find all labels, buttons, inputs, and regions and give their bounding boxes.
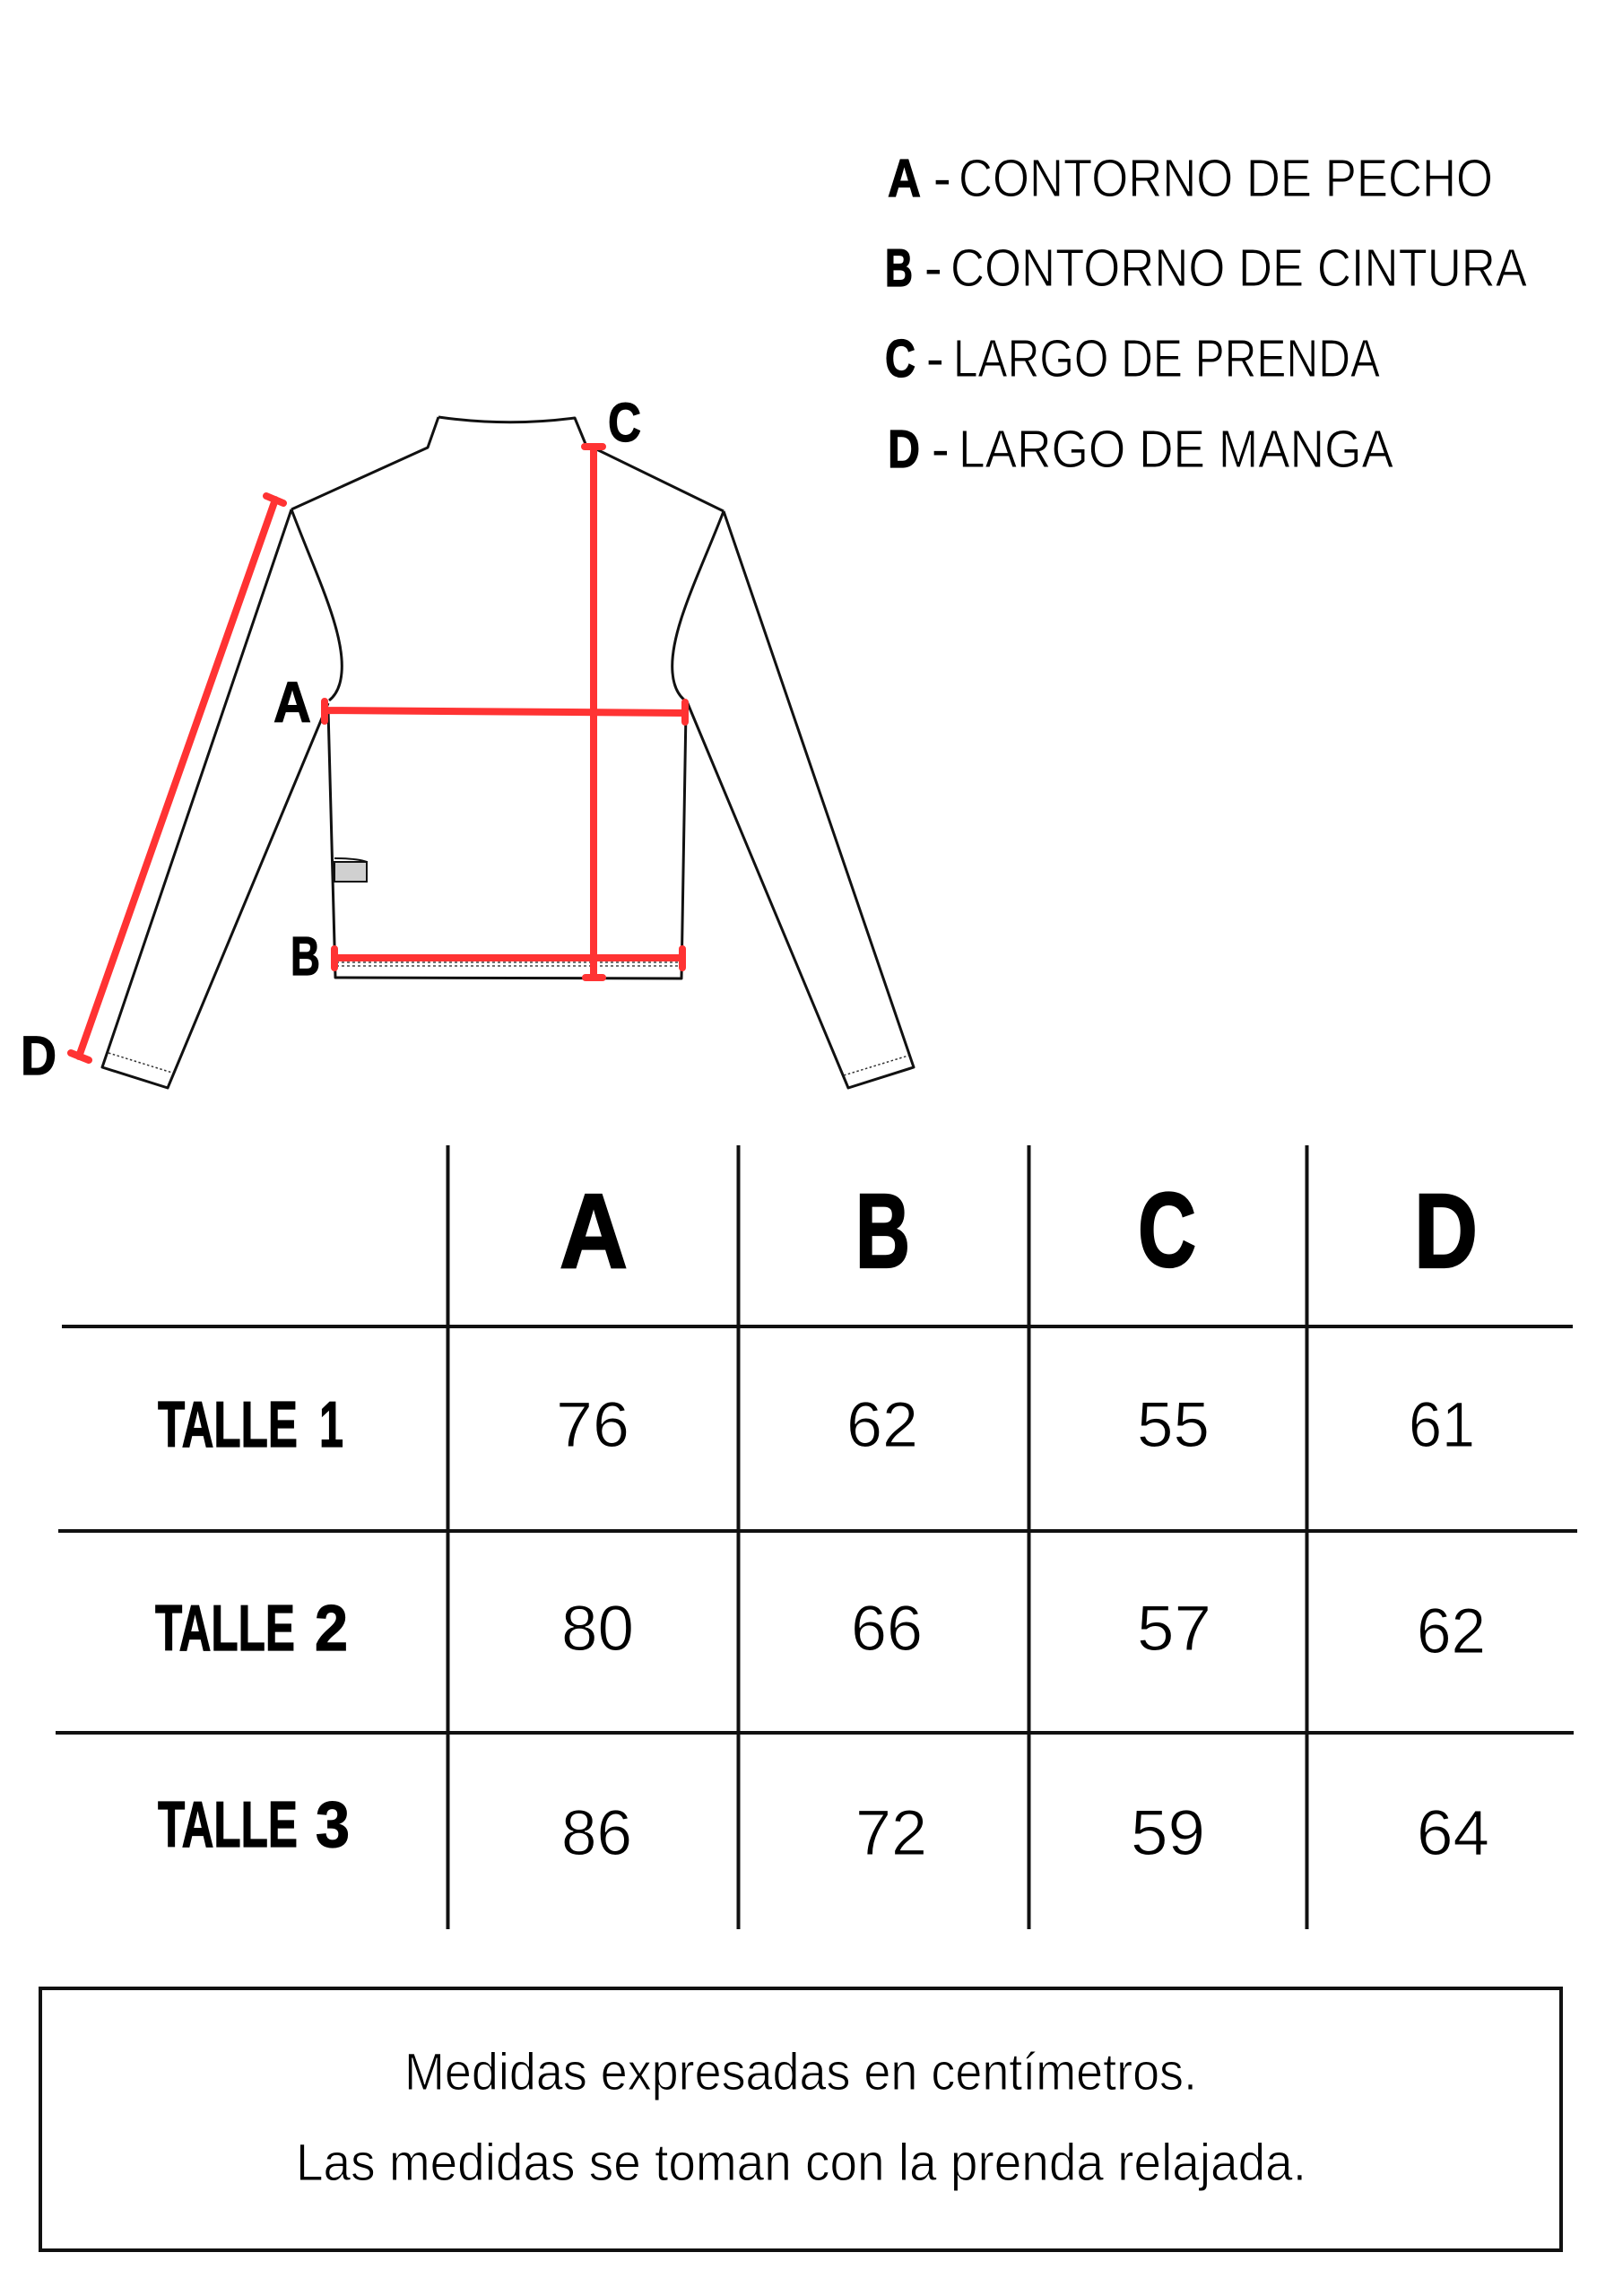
row: talle 3: 86 bbox=[561, 1798, 632, 1869]
legend item B: B bbox=[885, 239, 913, 298]
diagram label C: C bbox=[608, 392, 641, 453]
row: talle 2: 62 bbox=[1417, 1596, 1486, 1667]
legend item B: - bbox=[924, 239, 942, 298]
row: talle 2: 80 bbox=[561, 1594, 634, 1665]
column headers: A bbox=[560, 1172, 628, 1291]
legend: measurement key bbox=[885, 149, 1528, 479]
size table bbox=[56, 1145, 1577, 1929]
legend item B: CONTORNO DE CINTURA bbox=[950, 239, 1528, 298]
row: talle 1 bbox=[158, 1389, 1475, 1461]
column headers: C bbox=[1138, 1171, 1196, 1290]
row: talle 3: 72 bbox=[855, 1798, 927, 1869]
row: talle 3: TALLE bbox=[158, 1789, 298, 1861]
row: talle 1: TALLE bbox=[158, 1389, 298, 1461]
legend item D: D bbox=[888, 420, 920, 479]
legend item C: - bbox=[926, 329, 944, 388]
note line 1: Medidas expresadas en centímetros. bbox=[404, 2043, 1197, 2101]
row: talle 1: 61 bbox=[1409, 1390, 1475, 1461]
jacket outline bbox=[102, 417, 914, 1088]
measure line A bbox=[325, 701, 685, 722]
column headers: B bbox=[855, 1172, 910, 1291]
row: talle 3: 59 bbox=[1131, 1798, 1205, 1869]
row: talle 1: 62 bbox=[846, 1390, 918, 1461]
legend item A: A bbox=[888, 149, 921, 208]
note line 2: Las medidas se toman con la prenda relajada. bbox=[296, 2134, 1306, 2192]
note box bbox=[40, 1988, 1561, 2250]
column headers: D bbox=[1414, 1172, 1478, 1291]
row: talle 1: 76 bbox=[556, 1390, 629, 1461]
row: talle 3 bbox=[158, 1789, 1489, 1869]
row: talle 2: TALLE bbox=[155, 1593, 295, 1665]
row: talle 2: 66 bbox=[851, 1594, 923, 1665]
diagram label B: B bbox=[291, 926, 320, 987]
legend item A: CONTORNO DE PECHO bbox=[959, 149, 1493, 208]
row: talle 2: 2 bbox=[315, 1593, 348, 1665]
diagram label A: A bbox=[273, 670, 311, 735]
row: talle 3: 3 bbox=[316, 1789, 350, 1861]
legend item C: C bbox=[885, 329, 915, 388]
legend item A: - bbox=[933, 149, 951, 208]
measure line B bbox=[334, 949, 682, 968]
diagram: jacket flat sketch with measurements bbox=[21, 392, 914, 1088]
row: talle 3: 64 bbox=[1417, 1798, 1489, 1869]
diagram label D: D bbox=[21, 1025, 56, 1086]
row: talle 2: 57 bbox=[1137, 1594, 1211, 1665]
measure line D bbox=[71, 496, 283, 1060]
table grid bbox=[56, 1145, 1577, 1929]
row: talle 2 bbox=[155, 1593, 1486, 1667]
measure line C bbox=[585, 447, 603, 978]
legend item D: LARGO DE MANGA bbox=[959, 420, 1394, 479]
row: talle 1: 55 bbox=[1137, 1390, 1210, 1461]
legend item D: - bbox=[932, 420, 950, 479]
column headers bbox=[560, 1171, 1478, 1291]
legend item C: LARGO DE PRENDA bbox=[953, 329, 1381, 388]
pocket bbox=[334, 858, 367, 882]
row: talle 1: 1 bbox=[319, 1389, 343, 1461]
